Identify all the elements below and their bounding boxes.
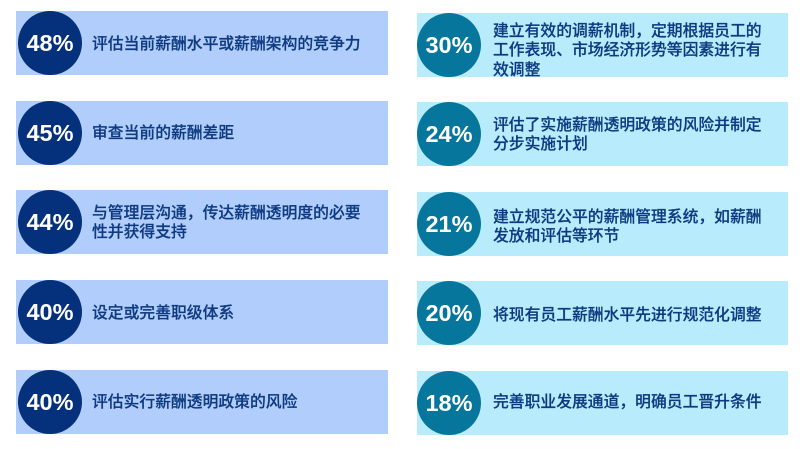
percentage circle	[417, 371, 481, 435]
percentage circle: 20%	[425, 300, 473, 326]
description: 审查当前的薪酬差距	[92, 125, 234, 142]
panel: right item 18%	[417, 371, 788, 435]
percentage circle: 45%	[26, 120, 74, 146]
percentage circle	[417, 192, 481, 256]
panel: left item 48%	[16, 11, 388, 75]
percentage circle	[18, 190, 82, 254]
description: 设定或完善职级体系	[92, 305, 234, 322]
panel: left item 45%	[16, 101, 388, 165]
panel: left item 40% risk	[16, 370, 388, 434]
percentage circle	[18, 370, 82, 434]
percentage circle: 24%	[425, 121, 473, 147]
panel: right item 24%	[417, 102, 788, 166]
panel: left item 40% system	[16, 280, 388, 344]
percentage circle	[417, 281, 481, 345]
description: 将现有员工薪酬水平先进行规范化调整	[493, 307, 762, 324]
description: 评估实行薪酬透明政策的风险	[92, 394, 297, 411]
description: 建立规范公平的薪酬管理系统，如薪酬 发放和评估等环节	[493, 209, 762, 245]
percentage circle: 18%	[425, 390, 473, 416]
panel: right item 20%	[417, 281, 788, 345]
percentage circle	[18, 280, 82, 344]
percentage circle: 40%	[26, 299, 74, 325]
percentage circle: 48%	[26, 30, 74, 56]
percentage circle: 30%	[425, 32, 473, 58]
panel: left item 44%	[16, 190, 388, 254]
description: 评估当前薪酬水平或薪酬架构的竞争力	[92, 36, 361, 53]
percentage circle	[18, 11, 82, 75]
panel: right item 21%	[417, 192, 788, 256]
description: 完善职业发展通道，明确员工晋升条件	[493, 394, 762, 411]
percentage circle: 40%	[26, 389, 74, 415]
description: 建立有效的调薪机制，定期根据员工的 工作表现、市场经济形势等因素进行有 效调整	[493, 23, 762, 79]
percentage circle: 44%	[26, 209, 74, 235]
percentage circle: 21%	[425, 211, 473, 237]
description: 评估了实施薪酬透明政策的风险并制定 分步实施计划	[493, 117, 762, 153]
percentage circle	[18, 101, 82, 165]
percentage circle	[417, 102, 481, 166]
panel: right item 30%	[417, 13, 788, 77]
percentage circle	[417, 13, 481, 77]
description: 与管理层沟通，传达薪酬透明度的必要 性并获得支持	[92, 205, 361, 241]
